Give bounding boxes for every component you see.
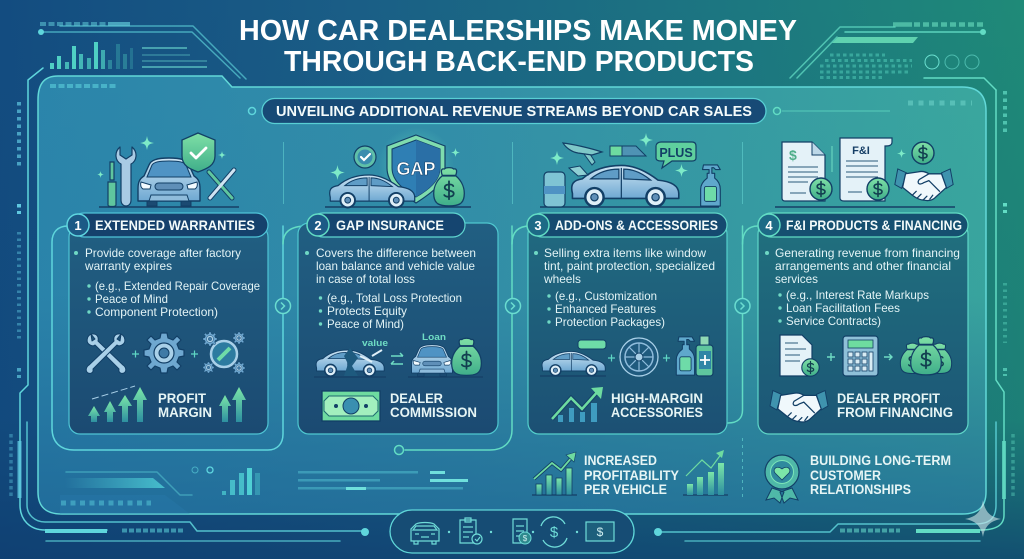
- title: HOW CAR DEALERSHIPS MAKE MONEY: [239, 15, 797, 47]
- label: high-margin accessories: ACCESSORIES: [611, 405, 703, 420]
- section heading: 4: [765, 218, 773, 233]
- label: dealer profit from financing: DEALER PROFIT: [837, 391, 941, 406]
- icon: handshake: [770, 391, 828, 422]
- description: Peace of Mind): [327, 317, 404, 331]
- label: PROFITABILITY: [584, 468, 679, 483]
- icon: dollar cycle: [541, 517, 567, 547]
- section heading: [527, 213, 727, 237]
- description: loan balance and vehicle value: [316, 259, 475, 273]
- subtitle banner: [145, 98, 890, 124]
- column dividers: [284, 142, 742, 204]
- label: PER VEHICLE: [584, 482, 667, 497]
- label: CUSTOMER: [810, 468, 881, 483]
- description: [534, 246, 715, 329]
- description: Protection Packages): [555, 315, 665, 329]
- label: profit margin: MARGIN: [158, 405, 212, 420]
- section heading: 1: [74, 218, 82, 233]
- description: Generating revenue from financing: [775, 246, 960, 260]
- top right tech decoration: [790, 24, 996, 90]
- description: Service Contracts): [786, 314, 881, 328]
- description: Component Protection): [95, 305, 218, 319]
- description: warranty expires: [84, 259, 172, 273]
- section heading: 3: [534, 218, 542, 233]
- label: high-margin accessories: [611, 391, 703, 420]
- panel body: [528, 223, 727, 434]
- icons: contract, calculator, money bags: [780, 335, 952, 376]
- description: [305, 246, 476, 331]
- icon: car with accessories: [540, 133, 720, 207]
- description: Loan Facilitation Fees: [786, 301, 900, 315]
- label: dealer commission: DEALER: [390, 391, 443, 406]
- panel 4: F&I products and financing: [758, 138, 968, 434]
- icon: car with GAP shield and money bag: [325, 127, 471, 207]
- description: Covers the difference between: [316, 246, 476, 260]
- section heading: [67, 213, 268, 237]
- bottom left decoration: [60, 467, 468, 514]
- icon: document with dollar: [513, 519, 531, 544]
- label: INCREASED: [584, 453, 657, 468]
- label: dealer profit from financing: FROM FINANCING: [837, 405, 953, 420]
- label: dealer commission: [390, 391, 477, 420]
- panel 3: add-ons and accessories: [527, 133, 727, 434]
- panel body: [298, 223, 498, 434]
- section heading: 2: [314, 218, 322, 233]
- icon: growth bars: [683, 450, 728, 495]
- panel body: [69, 226, 268, 434]
- label: profit margin: PROFIT: [158, 391, 207, 406]
- section heading: [307, 213, 465, 237]
- icon: car with accessories: PLUS: [659, 146, 693, 160]
- icon: profit chart: [532, 452, 577, 495]
- top left tech decoration: [38, 24, 246, 79]
- description: Protects Equity: [327, 304, 407, 318]
- section heading: EXTENDED WARRANTIES: [95, 217, 255, 233]
- icon: documents, coins and handshake: $: [789, 147, 797, 163]
- description: Selling extra items like window: [544, 246, 706, 260]
- icons: wrench, gear, gears: [86, 332, 245, 374]
- description: Peace of Mind: [95, 292, 168, 306]
- section heading: GAP INSURANCE: [336, 217, 444, 233]
- icon: ribbon badge with heart: [765, 455, 799, 503]
- main panel: [38, 76, 986, 514]
- bottom icon bar: [390, 510, 634, 553]
- icon: corner sparkle: [965, 500, 1001, 537]
- title: THROUGH BACK-END PRODUCTS: [284, 46, 754, 78]
- arrow: panel 3 to 4: [735, 298, 750, 314]
- title: [239, 15, 797, 78]
- icon: rising chart: [552, 387, 603, 422]
- icon: car: [411, 522, 439, 544]
- subtitle banner: UNVEILING ADDITIONAL REVENUE STREAMS BEYOND CAR SALES: [276, 104, 752, 120]
- icon: documents, coins and handshake: [775, 138, 955, 207]
- panel body: [758, 223, 968, 434]
- icon: documents, coins and handshake: F&I: [852, 145, 870, 157]
- section heading: ADD-ONS & ACCESSORIES: [555, 217, 718, 233]
- icons: damaged car to repaired car with loan: Loan: [422, 332, 446, 343]
- label: [584, 453, 679, 497]
- icon: car with tools and shield: [97, 133, 239, 207]
- label: dealer commission: COMMISSION: [390, 405, 477, 420]
- icon: profit arrows: [88, 386, 246, 422]
- description: arrangements and other financial: [775, 259, 951, 273]
- icon: cash: $: [597, 525, 604, 539]
- label: profit margin: [158, 391, 212, 420]
- icon: clipboard: [460, 518, 482, 544]
- divider: [742, 438, 744, 500]
- arrow: panel 2 to 3: [506, 298, 520, 314]
- description: Enhanced Features: [555, 302, 656, 316]
- description: wheels: [543, 272, 581, 286]
- description: (e.g., Interest Rate Markups: [786, 288, 929, 302]
- callout: building long-term customer relationships: [765, 453, 951, 503]
- callout: increased profitability per vehicle: [532, 450, 728, 497]
- panel 2: gap insurance: [298, 127, 498, 434]
- label: [810, 453, 951, 497]
- connector frames: [52, 226, 758, 454]
- description: in case of total loss: [316, 272, 415, 286]
- description: (e.g., Total Loss Protection: [327, 291, 462, 305]
- label: high-margin accessories: HIGH-MARGIN: [611, 391, 703, 406]
- label: RELATIONSHIPS: [810, 482, 911, 497]
- icons: car, wheel, cleaning products: [540, 336, 713, 376]
- description: services: [775, 272, 818, 286]
- section heading: [758, 213, 968, 237]
- arrow: panel 1 to 2: [276, 298, 290, 314]
- description: (e.g., Customization: [555, 289, 657, 303]
- panel 1: extended warranties: [67, 133, 268, 434]
- icon: banknote: [322, 391, 380, 421]
- icon: document with dollar: $: [523, 534, 528, 543]
- description: tint, paint protection, specialized: [544, 259, 715, 273]
- label: dealer profit from financing: [837, 391, 953, 420]
- icons: damaged car to repaired car with loan: value: [362, 338, 388, 349]
- icon: car with GAP shield and money bag: GAP: [396, 159, 436, 179]
- icons: damaged car to repaired car with loan: [314, 332, 483, 377]
- description: [74, 246, 260, 319]
- section heading: F&I PRODUCTS & FINANCING: [786, 217, 962, 233]
- icon: dollar cycle: $: [550, 524, 559, 541]
- description: [765, 246, 960, 328]
- description: Provide coverage after factory: [85, 246, 241, 260]
- icon: cash: [586, 522, 614, 541]
- description: (e.g., Extended Repair Coverage: [95, 279, 260, 293]
- label: BUILDING LONG-TERM: [810, 453, 951, 468]
